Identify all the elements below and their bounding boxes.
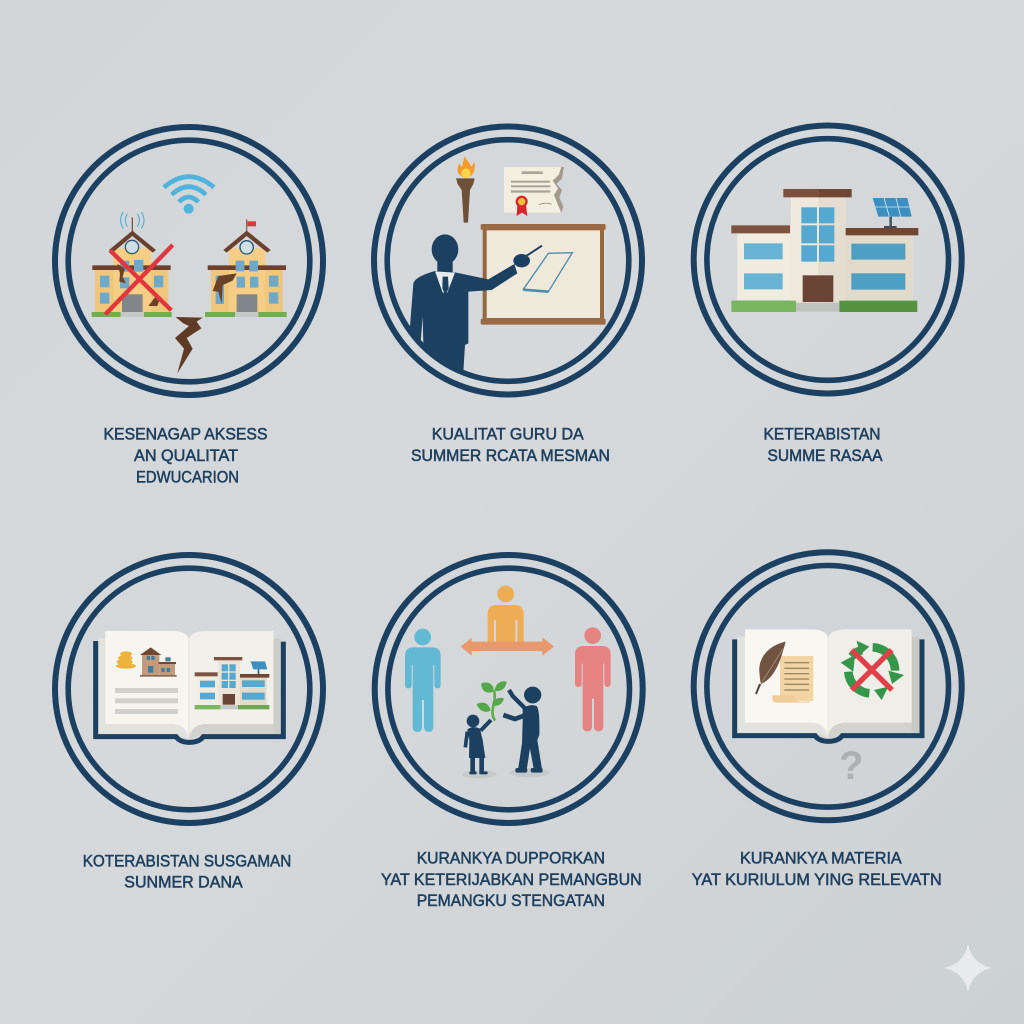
label [104,424,268,487]
panel: curriculum materials [692,552,962,889]
label: AN QUALITAT [134,446,238,465]
icon: teacher silhouette [410,234,542,372]
icon: open book [735,629,922,741]
icon: small house [140,647,177,677]
icon: coins [116,651,136,669]
label [83,852,291,892]
icon: torn certificate [504,167,564,216]
icon: orange person with arrow [461,586,554,656]
panel: limited funding [55,555,323,892]
icon: open book [96,631,283,742]
illustration: open book with school [96,631,283,742]
panel: stakeholder support [375,555,643,910]
label: SUMMER RCATA MESMAN [411,446,610,465]
illustration: schools and wifi [92,177,287,373]
panel: teacher quality [374,126,642,465]
label [764,424,883,465]
illustration: book with scroll and crossed cycle [735,629,922,788]
panel: access gap [55,127,323,487]
icon: cracked school [205,219,287,317]
label [381,849,642,910]
icon: solar panel [873,198,912,228]
icon: crossed-out cycle [841,641,904,700]
label: YAT KETERIJABKAN PEMANGBUN [381,870,642,889]
label: YAT KURIULUM YING RELEVATN [692,870,942,889]
icon: damaged school crossed out [92,212,173,317]
icon: question mark: ? [839,744,864,788]
label: KURANKYA DUPPORKAN [417,849,605,868]
icon: sparkle watermark [944,944,992,992]
illustration: stakeholders [405,586,611,778]
label: KOTERABISTAN SUSGAMAN [83,852,291,871]
label: PEMANGKU STENGATAN [417,891,605,910]
icon: mini modern school [195,657,269,709]
icon: scroll [772,656,813,703]
label: KETERABISTAN [764,424,880,443]
icon: blue person [405,629,441,732]
label: EDWUCARION [136,468,239,487]
double ring [694,552,962,820]
double ring [55,127,323,395]
icon: ground crack [175,317,203,373]
icon: wifi [164,177,214,214]
icon: adult and child with plant [462,681,550,778]
label [411,424,610,465]
illustration: teacher [410,156,606,372]
label: SUMME RASAA [768,446,883,465]
double ring [694,126,962,394]
label: KESENAGAP AKSESS [104,424,268,444]
label: KUALITAT GURU DA [432,424,584,443]
double ring [374,126,642,394]
label: KURANKYA MATERIA [740,849,902,868]
icon: feather quill [756,642,786,694]
icon: building [731,189,918,312]
illustration: modern school [731,189,918,312]
icon: torch [456,156,475,223]
icon: presentation board [481,224,606,325]
label [692,849,942,889]
text lines [115,688,178,714]
label: SUNMER DANA [124,873,243,892]
panel: resource scarcity [694,126,962,465]
double ring [55,555,323,823]
double ring [375,555,643,823]
icon: red person [575,627,611,731]
